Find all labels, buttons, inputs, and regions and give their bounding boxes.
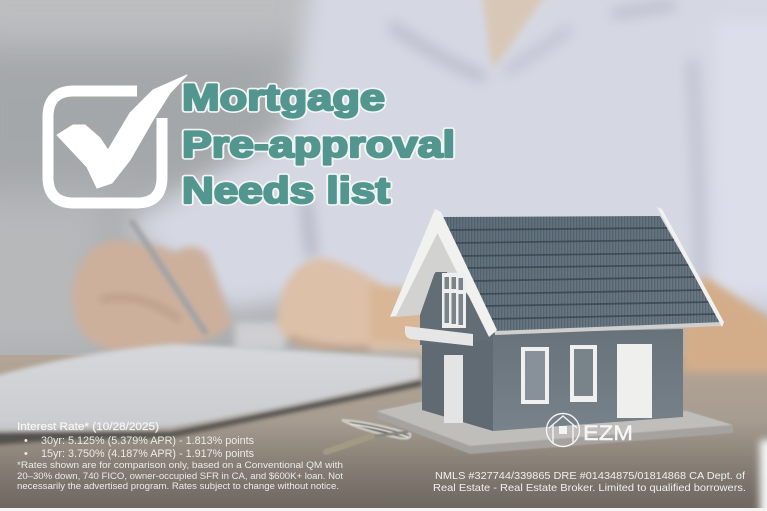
roof xyxy=(443,216,723,335)
checkbox outline xyxy=(48,91,162,203)
bottom shading xyxy=(0,420,767,510)
logo wordmark: EZM xyxy=(583,422,633,445)
rate heading: Interest Rate* (10/28/2025) xyxy=(17,421,159,433)
title xyxy=(182,77,455,211)
check mark xyxy=(57,75,187,188)
rate bullet 30yr: 30yr: 5.125% (5.379% APR) - 1.813% points xyxy=(41,435,254,447)
licensing text: Real Estate - Real Estate Broker. Limited to qualified borrowers. xyxy=(433,482,746,494)
logo house emblem xyxy=(546,414,580,446)
gable white underside xyxy=(395,232,467,317)
roof white fascia xyxy=(390,207,724,337)
title line 3: Needs list xyxy=(182,170,390,211)
upper window xyxy=(442,273,466,328)
front window 1 xyxy=(521,347,549,404)
left door xyxy=(444,355,463,423)
table surface xyxy=(0,355,767,511)
balcony ledge xyxy=(405,326,473,346)
title line 3: Needs list xyxy=(182,170,390,211)
rate bullet 30yr: • xyxy=(24,435,28,447)
neck xyxy=(482,0,549,64)
front window 2 xyxy=(570,345,597,402)
front door xyxy=(617,344,652,418)
rate bullet 15yr: • xyxy=(24,448,28,460)
title line 1: Mortgage xyxy=(182,77,385,118)
left wall xyxy=(422,333,493,431)
shirt xyxy=(125,0,767,320)
licensing text: NMLS #327744/339865 DRE #01434875/01814868 CA Dept. of xyxy=(435,470,745,482)
right edge fade xyxy=(760,440,767,511)
title line 1: Mortgage xyxy=(182,77,385,118)
title line 2: Pre-approval xyxy=(182,124,455,165)
paper notebook xyxy=(0,344,422,445)
rate disclaimer xyxy=(17,460,344,491)
pen xyxy=(132,222,205,332)
rate disclaimer: necessarily the advertised program. Rates subject to change without notice. xyxy=(17,481,339,491)
house base slab xyxy=(377,400,733,454)
rate bullet 15yr: 15yr: 3.750% (4.187% APR) - 1.917% points xyxy=(41,448,254,460)
rate disclaimer: *Rates shown are for comparison only, based on a Conventional QM with xyxy=(17,460,343,470)
front wall xyxy=(493,329,683,431)
house model xyxy=(377,207,733,454)
hand and arms xyxy=(72,240,767,372)
keys xyxy=(326,420,410,452)
title line 2: Pre-approval xyxy=(182,124,455,165)
EZM logo xyxy=(546,414,633,446)
interest rate block xyxy=(17,421,344,491)
licensing text xyxy=(433,470,746,494)
rate disclaimer: 20–30% down, 740 FICO, owner-occupied SFR in CA, and $600K+ loan. Not xyxy=(17,471,344,481)
bottom white strip xyxy=(0,508,767,511)
gable wall xyxy=(420,265,493,345)
checkbox icon xyxy=(48,75,187,203)
